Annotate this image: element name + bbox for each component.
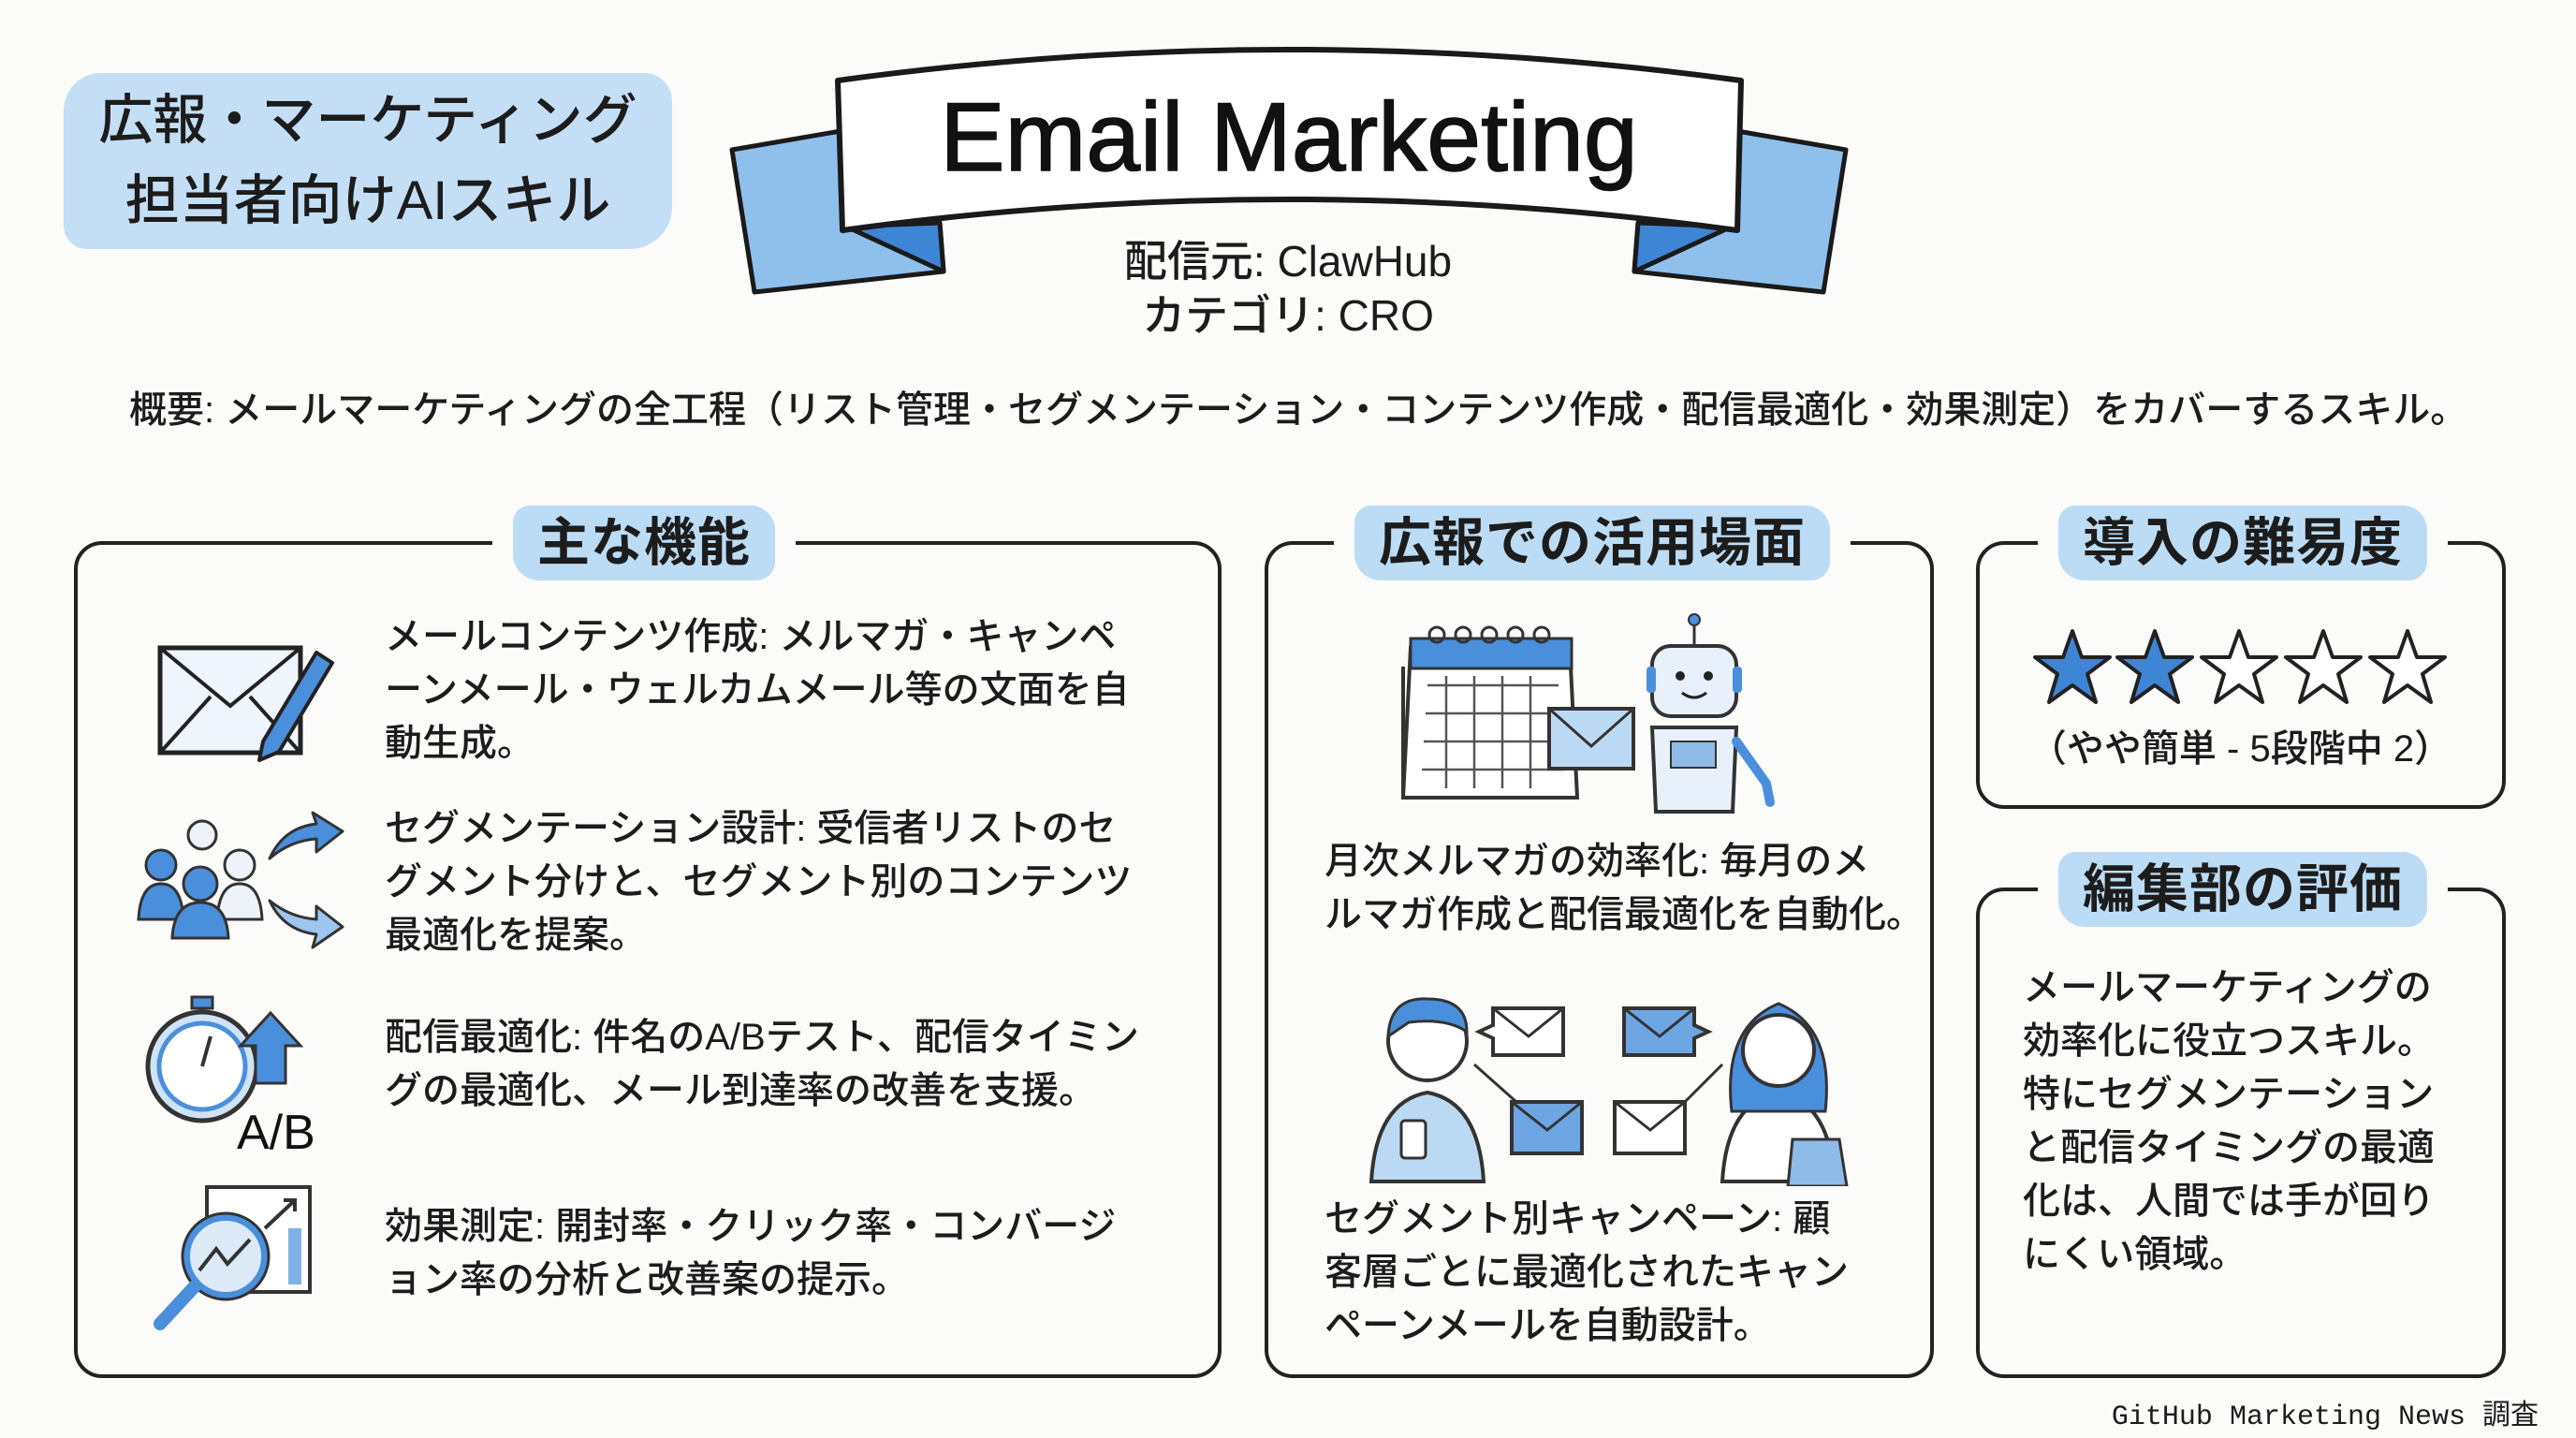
panel: main features bbox=[74, 541, 1222, 1378]
heading: review: 編集部の評価 bbox=[2083, 859, 2403, 918]
review text: メールマーケティングの bbox=[2023, 967, 2432, 1008]
overview: 概要: メールマーケティングの全工程（リスト管理・セグメンテーション・コンテンツ作成・配信最適化・効果測定）をカバーするスキル。 bbox=[129, 389, 2467, 431]
heading: use cases: 広報での活用場面 bbox=[1379, 513, 1806, 572]
tag: target audience: 担当者向けAIスキル bbox=[125, 170, 610, 231]
panel: difficulty bbox=[1976, 541, 2506, 809]
text: monthly newsletter: 月次メルマガの効率化: 毎月のメ bbox=[1325, 841, 1869, 882]
heading: use cases bbox=[1334, 506, 1851, 580]
meta info: カテゴリ: CRO bbox=[1142, 291, 1434, 340]
banner title ribbon bbox=[730, 47, 1848, 294]
review text: にくい領域。 bbox=[2023, 1234, 2247, 1275]
star rating bbox=[2033, 629, 2447, 704]
text: content creation: メールコンテンツ作成: メルマガ・キャンペ bbox=[385, 616, 1116, 657]
icon: segmentation people bbox=[137, 811, 344, 949]
review text: 化は、人間では手が回り bbox=[2023, 1181, 2435, 1222]
text: content creation: ーンメール・ウェルカムメール等の文面を自 bbox=[385, 669, 1130, 711]
icon: stopwatch and A/B: A/B bbox=[237, 1106, 315, 1160]
text: segmentation: セグメンテーション設計: 受信者リストのセ bbox=[385, 808, 1116, 849]
text: segment campaigns bbox=[1325, 1198, 1849, 1346]
text: segmentation: グメント分けと、セグメント別のコンテンツ bbox=[385, 861, 1132, 902]
white ribbon bbox=[838, 50, 1741, 230]
text: delivery optimization bbox=[385, 1017, 1139, 1111]
text: segment campaigns: セグメント別キャンペーン: 顧 bbox=[1325, 1198, 1830, 1240]
text: segmentation bbox=[385, 808, 1132, 956]
icon: stopwatch and A/B bbox=[146, 996, 315, 1160]
text: segment campaigns: ペーンメールを自動設計。 bbox=[1325, 1305, 1771, 1346]
left tail bbox=[732, 131, 944, 292]
heading: difficulty bbox=[2038, 506, 2448, 580]
review text: と配信タイミングの最適 bbox=[2023, 1127, 2435, 1168]
text: content creation: 動生成。 bbox=[385, 723, 534, 764]
text: segmentation: 最適化を提案。 bbox=[385, 915, 647, 956]
illustration: calendar and robot bbox=[1400, 613, 1775, 814]
review text: 効率化に役立つスキル。 bbox=[2023, 1020, 2435, 1062]
icon: envelope with pen bbox=[157, 646, 335, 762]
heading: review bbox=[2038, 852, 2448, 927]
text: delivery optimization: グの最適化、メール到達率の改善を支援。 bbox=[385, 1070, 1096, 1111]
text: monthly newsletter: ルマガ作成と配信最適化を自動化。 bbox=[1325, 894, 1924, 935]
heading: main features: 主な機能 bbox=[537, 513, 751, 572]
text: measurement: 効果測定: 開封率・クリック率・コンバージ bbox=[385, 1206, 1116, 1247]
meta info bbox=[1124, 237, 1452, 340]
footer credit: GitHub Marketing News 調査 bbox=[2112, 1401, 2539, 1433]
heading: difficulty: 導入の難易度 bbox=[2083, 513, 2403, 572]
review text bbox=[2023, 967, 2435, 1275]
tag: target audience bbox=[64, 73, 672, 249]
text: measurement: ョン率の分析と改善案の提示。 bbox=[385, 1259, 909, 1300]
text: delivery optimization: 配信最適化: 件名のA/Bテスト、配信タイミン bbox=[385, 1017, 1139, 1058]
tag: target audience: 広報・マーケティング bbox=[98, 90, 637, 151]
review text: 特にセグメンテーション bbox=[2023, 1074, 2434, 1115]
right tail bbox=[1634, 131, 1846, 292]
title text: Email Marketing bbox=[940, 83, 1638, 192]
panel: editorial review bbox=[1976, 888, 2506, 1378]
heading: main features bbox=[492, 506, 796, 580]
text: monthly newsletter bbox=[1325, 841, 1924, 935]
text: segment campaigns: 客層ごとに最適化されたキャン bbox=[1325, 1252, 1849, 1293]
icon: analytics magnifier bbox=[154, 1185, 312, 1330]
text: measurement bbox=[385, 1206, 1116, 1300]
text: content creation bbox=[385, 616, 1130, 764]
meta info: 配信元: ClawHub bbox=[1124, 237, 1452, 286]
panel: PR use cases bbox=[1265, 541, 1934, 1378]
illustration: segmented customers bbox=[1368, 997, 1848, 1186]
difficulty text: （やや簡単 - 5段階中 2） bbox=[2029, 728, 2452, 770]
